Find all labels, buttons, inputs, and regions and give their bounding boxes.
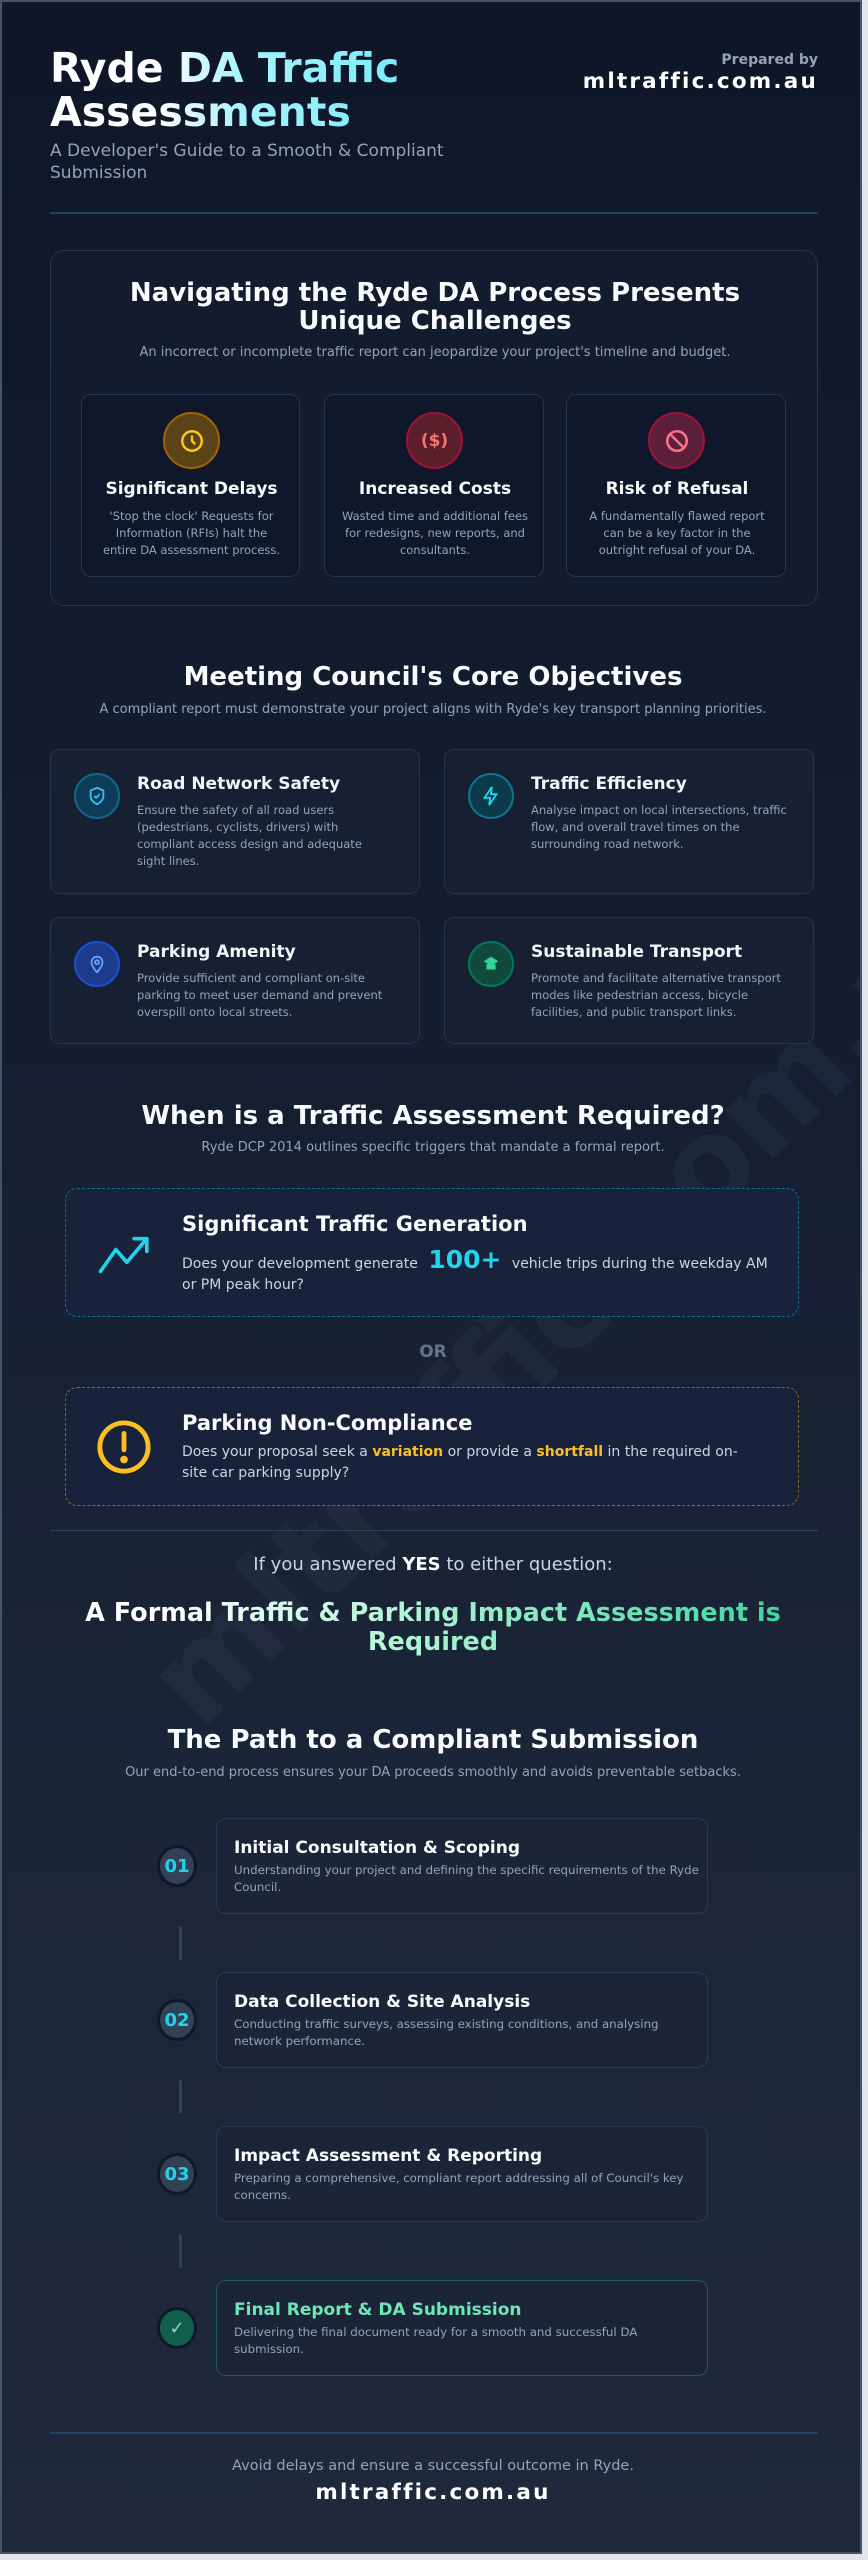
card: delays: 'Stop the clock' Requests for Information (RFIs) halt the entire DA assessment process.: [103, 509, 280, 557]
heading: challenges: [130, 278, 740, 336]
card: parking: Parking Amenity: [137, 942, 296, 962]
heading: challenges: Unique Challenges: [298, 306, 572, 336]
callout: traffic generation: [65, 1188, 799, 1317]
text: if yes: If you answered YES to either question:: [253, 1554, 613, 1575]
card: refusal: Risk of Refusal: [606, 479, 748, 499]
icon: ban: [648, 412, 705, 469]
icon: warning: [97, 1420, 151, 1474]
icon: transport: [468, 941, 514, 987]
icon: pin: [74, 941, 120, 987]
icon: shield: [74, 773, 120, 819]
step 4: Delivering the final document ready for a smooth and successful DA submission.: [234, 2325, 637, 2356]
prepared by: Prepared by: [721, 52, 818, 68]
card: costs: Wasted time and additional fees for redesigns, new reports, and consultants.: [342, 509, 528, 557]
step 2: Data Collection & Site Analysis: [234, 1992, 530, 2012]
card: refusal: A fundamentally flawed report can be a key factor in the outright refusal of your DA.: [589, 509, 765, 557]
card: refusal: [566, 394, 786, 577]
step 2: Conducting traffic surveys, assessing existing conditions, and analysing network performance.: [234, 2017, 659, 2048]
step 2: [157, 1972, 708, 2068]
prepared by: [583, 52, 818, 94]
header: title block: [50, 44, 444, 183]
card: efficiency: Analyse impact on local intersections, traffic flow, and overall travel times on the surrounding road network.: [531, 803, 787, 851]
card: road safety: Ensure the safety of all road users (pedestrians, cyclists, drivers) with compliant access design and adequate sight lines.: [137, 803, 362, 868]
card: costs: Increased Costs: [359, 479, 511, 499]
heading: conclusion: A Formal Traffic & Parking Impact Assessment is Required: [85, 1598, 781, 1657]
card: efficiency: [444, 749, 814, 894]
subtitle: A Developer's Guide to a Smooth & Compliant Submission: [50, 141, 444, 183]
callout: parking non-compliance: Parking Non-Compliance: [182, 1411, 472, 1435]
heading: objectives: Meeting Council's Core Objectives: [184, 662, 682, 692]
card: efficiency: Traffic Efficiency: [531, 774, 687, 794]
panel: challenges: [50, 250, 818, 606]
title: Assessments: [50, 88, 351, 136]
callout: traffic generation: Does your development generate 100+ vehicle trips during the weekday AM or PM peak hour?: [182, 1245, 768, 1293]
step 2: 02: [164, 2010, 190, 2030]
prepared by: mltraffic.com.au: [583, 69, 818, 94]
step 4: Final Report & DA Submission: [234, 2300, 522, 2320]
step 4: ✓: [169, 2318, 185, 2338]
icon: dollar: ($): [421, 430, 448, 450]
step 1: Understanding your project and defining the specific requirements of the Ryde Council.: [234, 1863, 699, 1894]
card: sustainable: Sustainable Transport: [531, 942, 742, 962]
title: [50, 46, 480, 134]
icon: bolt: [468, 773, 514, 819]
icon: clock: [163, 412, 220, 469]
card: parking: [50, 917, 420, 1044]
card: sustainable: [444, 917, 814, 1044]
step 1: 01: [164, 1856, 190, 1876]
callout: parking non-compliance: [65, 1387, 799, 1506]
icon: dollar: [406, 412, 463, 469]
step 1: Initial Consultation & Scoping: [234, 1838, 520, 1858]
heading: when required: When is a Traffic Assessment Required?: [141, 1101, 725, 1131]
card: parking: Provide sufficient and compliant on-site parking to meet user demand and prevent overspill onto local streets.: [137, 971, 382, 1019]
footer: [232, 2458, 634, 2505]
card: delays: Significant Delays: [105, 479, 278, 499]
callout: traffic generation: Significant Traffic Generation: [182, 1212, 528, 1236]
step 3: 03: [164, 2164, 190, 2184]
card: sustainable: Promote and facilitate alternative transport modes like pedestrian access, bicycle facilities, and public transport links.: [531, 971, 781, 1019]
step 1: [157, 1818, 708, 1914]
step 3: Preparing a comprehensive, compliant report addressing all of Council's key concerns.: [234, 2171, 684, 2202]
step 3: Impact Assessment & Reporting: [234, 2146, 542, 2166]
heading: challenges: Navigating the Ryde DA Process Presents: [130, 278, 740, 308]
card: road safety: [50, 749, 420, 894]
card: road safety: Road Network Safety: [137, 774, 340, 794]
card: costs: [324, 394, 544, 577]
footer: Avoid delays and ensure a successful outcome in Ryde.: [232, 2458, 634, 2474]
subtitle: challenges: An incorrect or incomplete traffic report can jeopardize your project's timeline and budget.: [140, 345, 730, 360]
card: delays: [81, 394, 300, 577]
subtitle: objectives: A compliant report must demonstrate your project aligns with Ryde's key transport planning priorities.: [100, 702, 766, 717]
step 4: [157, 2280, 708, 2376]
title: Ryde DA Traffic: [50, 44, 399, 92]
icon: trending up: [98, 1236, 149, 1274]
step 3: [157, 2126, 708, 2222]
callout: parking non-compliance: Does your proposal seek a variation or provide a shortfall in the required on-site car parking supply?: [182, 1444, 738, 1481]
subtitle: path: Our end-to-end process ensures your DA proceeds smoothly and avoids preventable setbacks.: [125, 1765, 741, 1780]
footer: mltraffic.com.au: [315, 2480, 551, 2505]
heading: path: The Path to a Compliant Submission: [168, 1725, 698, 1755]
subtitle: when required: Ryde DCP 2014 outlines specific triggers that mandate a formal report.: [201, 1140, 665, 1155]
OR label: OR: [419, 1342, 447, 1362]
